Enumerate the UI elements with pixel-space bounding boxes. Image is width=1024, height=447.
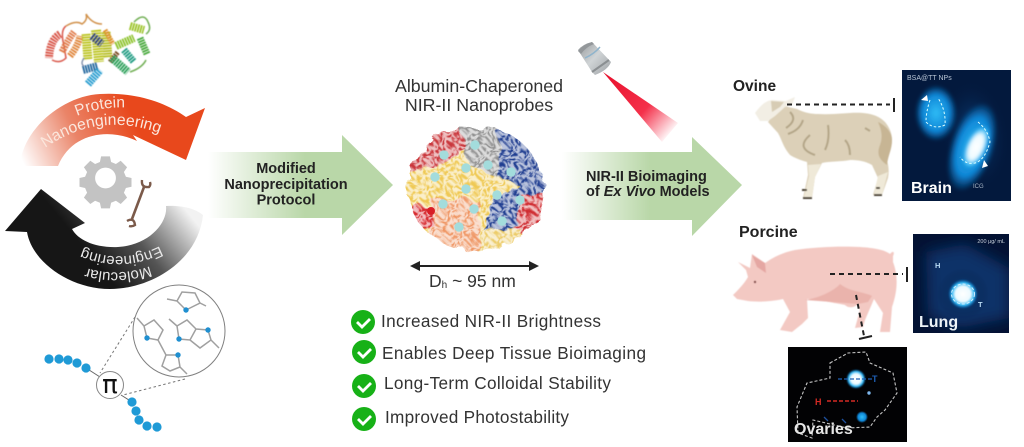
list: nanoprobe benefits (351, 310, 646, 431)
title: nanoprobes: Albumin-Chaperoned (395, 76, 563, 96)
panel: lung image: Lung (919, 314, 958, 331)
arrow: modified nanoprecipitation protocol (208, 135, 393, 235)
icon: pig (733, 247, 897, 332)
label: hydrodynamic diameter: ~ 95 nm (447, 271, 516, 291)
icon: wrench (127, 180, 150, 226)
arrow: NIR-II bioimaging (562, 137, 742, 236)
arrow: hydrodynamic diameter (410, 261, 539, 271)
benefit 4: Improved Photostability (385, 407, 569, 427)
benefit 3: Long-Term Colloidal Stability (384, 373, 611, 393)
arrow: protein nanoengineering: Nanoengineering (40, 114, 162, 147)
icon: gear (80, 156, 132, 208)
nanoprobe particle (406, 126, 547, 252)
panel: lung image: T (978, 300, 983, 309)
label: hydrodynamic diameter: h (442, 280, 447, 291)
panel: lung image: 200 μg/ mL (977, 239, 1005, 245)
panel: brain image (902, 70, 1016, 201)
connector: pig to ovaries (856, 295, 872, 339)
label: protocol: Modified (256, 161, 316, 177)
icon: conjugated polymer with pi core (44, 285, 225, 432)
panel: ovaries image (788, 347, 907, 442)
icon: microscope objective with laser beam (578, 42, 678, 142)
label: protocol: Protocol (257, 192, 315, 208)
arrow: protein nanoengineering (22, 94, 205, 166)
panel: brain image: ICG (973, 184, 984, 190)
panel: lung image (913, 234, 1009, 333)
icon: conjugated polymer with pi core: π (102, 370, 118, 400)
connector: sheep to brain (787, 98, 894, 112)
arrow: molecular engineering (5, 189, 203, 289)
label: bioimaging: NIR-II Bioimaging (586, 169, 707, 185)
label: protocol: Nanoprecipitation (224, 177, 348, 193)
panel: brain image: BSA@TT NPs (907, 75, 952, 82)
label: molecular engineering: Molecular (84, 266, 152, 282)
connector: pig to lung (830, 267, 907, 282)
icon: albumin protein structure (49, 14, 150, 84)
panel: ovaries image: T (872, 374, 878, 384)
benefit 2: Enables Deep Tissue Bioimaging (382, 343, 646, 363)
label: ovine: Ovine (733, 78, 776, 95)
title: nanoprobes: NIR-II Nanoprobes (405, 95, 553, 115)
label: bioimaging: Ex Vivo Models (604, 184, 710, 200)
label: bioimaging: of (586, 184, 604, 200)
label: porcine: Porcine (739, 224, 798, 241)
label: hydrodynamic diameter: D (429, 271, 442, 291)
label: protein nanoengineering: Protein (74, 96, 124, 116)
benefit 1: Increased NIR-II Brightness (381, 311, 601, 331)
panel: lung image: H (935, 261, 940, 270)
icon: sheep (755, 97, 892, 198)
panel: ovaries image: Ovaries (794, 421, 853, 438)
arrow: molecular engineering: Engineering (80, 246, 163, 266)
panel: ovaries image: H (815, 397, 822, 407)
panel: brain image: Brain (911, 180, 952, 197)
